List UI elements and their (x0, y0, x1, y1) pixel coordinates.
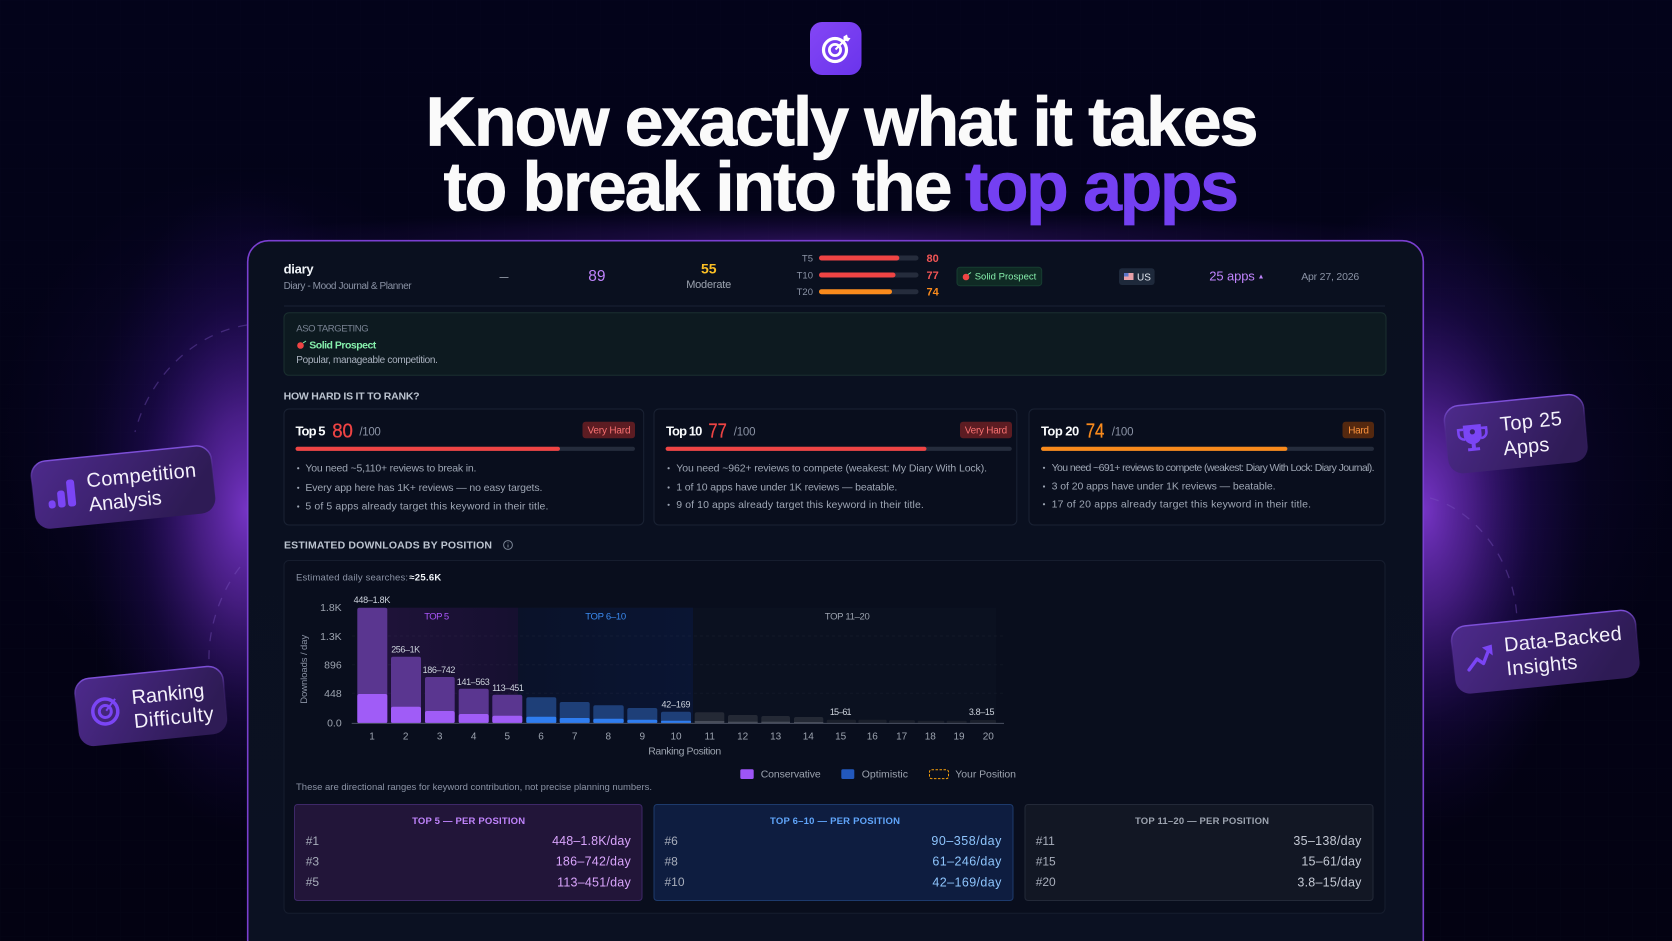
keyword header row: 55 (701, 260, 717, 276)
panel: top 11-20 per position (1025, 804, 1373, 900)
callout: data-backed insights (1450, 609, 1641, 695)
keyword header row (284, 253, 1359, 299)
bar chart: 8 (606, 732, 612, 742)
panel: top 5 difficulty: You need ~5,110+ reviews to break in. (305, 462, 476, 474)
title (426, 82, 1258, 226)
panel: top 5 difficulty: 80 (332, 420, 353, 442)
panel: top 20 difficulty: Hard (1348, 426, 1369, 436)
keyword header row: Diary - Mood Journal & Planner (284, 281, 412, 292)
keyword header row: diary (284, 262, 314, 276)
panel: top 5 per position: 113–451/day (557, 875, 631, 889)
keyword header row: Moderate (686, 279, 731, 291)
panel: top 20 difficulty (1029, 409, 1385, 525)
dashed connector arcs (135, 325, 1517, 662)
callout: competition analysis: Analysis (88, 487, 163, 516)
callout: competition analysis: Competition (85, 460, 197, 492)
bar chart: 3 (437, 732, 443, 742)
keyword header row: Apr 27, 2026 (1301, 271, 1359, 283)
bar chart: 15 (835, 732, 847, 742)
title: top apps (965, 148, 1239, 226)
bar chart: TOP 6–10 (585, 611, 626, 622)
bar chart: 17 (896, 732, 908, 742)
callout: competition analysis (30, 444, 217, 530)
callout: ranking difficulty: Difficulty (133, 703, 215, 733)
panel: downloads chart: Estimated daily searches: (296, 572, 408, 583)
icon: bar chart (46, 479, 76, 509)
icon: trophy (1458, 423, 1488, 452)
panel: ASO targeting: Popular, manageable competition. (296, 355, 438, 366)
panel: top 10 difficulty: Very Hard (965, 426, 1007, 436)
badge: solid prospect: Solid Prospect (975, 272, 1037, 283)
score mini bars: T10 (797, 270, 813, 281)
panel: top 11-20 per position: TOP 11–20 — PER POSITION (1135, 816, 1269, 827)
panel: downloads chart: These are directional ranges for keyword contribution, not precise planning numbers. (296, 782, 652, 793)
chart legend (740, 769, 1016, 781)
panel: top 11-20 per position: #15 (1036, 854, 1056, 868)
panel: ASO targeting: Solid Prospect (309, 340, 377, 352)
panel: top 5 difficulty: Top 5 (296, 423, 326, 438)
callout: data-backed insights: Insights (1505, 651, 1578, 680)
bar chart (299, 595, 1004, 758)
bar chart: TOP 5 (424, 611, 449, 622)
panel: top 20 difficulty: 17 of 20 apps already target this keyword in their title. (1052, 498, 1311, 510)
callout: ranking difficulty (73, 665, 229, 748)
bar chart: 896 (324, 660, 342, 672)
bar chart: 15–61 (830, 707, 852, 717)
panel: top 6-10 per position: TOP 6–10 — PER POSITION (770, 816, 900, 827)
score mini bars: T20 (797, 287, 813, 298)
title: to break into the (444, 148, 952, 226)
bar chart: Downloads / day (299, 635, 310, 704)
panel: top 6-10 per position: #10 (664, 875, 685, 889)
icon: trend arrow (1467, 645, 1494, 670)
panel: top 10 difficulty: 1 of 10 apps have under 1K reviews — beatable. (676, 482, 897, 494)
bar chart: 16 (867, 732, 878, 742)
bar chart: 42–169 (662, 700, 690, 710)
panel: top 5 per position: #1 (306, 834, 319, 848)
callout: top 25 apps: Apps (1502, 434, 1550, 460)
bar chart: 13 (770, 732, 782, 742)
panel: downloads chart: ≈25.6K (409, 572, 441, 583)
panel: top 10 difficulty: /100 (734, 426, 756, 438)
panel: top 20 difficulty: 74 (1086, 420, 1104, 442)
panel: top 5 difficulty: Every app here has 1K+ reviews — no easy targets. (305, 482, 542, 494)
panel: top 5 per position: #5 (306, 875, 319, 889)
bar chart: 14 (803, 732, 814, 742)
panel: top 20 difficulty: You need ~691+ reviews to compete (weakest: Diary With Lock: Diary Journal). (1052, 462, 1375, 474)
bar chart: 448–1.8K (354, 595, 390, 605)
bar chart: 4 (471, 732, 477, 742)
bar chart: 10 (670, 732, 682, 742)
panel: top 6-10 per position: 90–358/day (931, 834, 1002, 848)
chart legend: Conservative (761, 769, 821, 781)
panel: top 6-10 per position: 42–169/day (932, 875, 1002, 889)
bar chart: TOP 11–20 (825, 611, 870, 622)
badge: country: US (1137, 272, 1151, 283)
title: Know exactly what it takes (426, 82, 1258, 160)
bar chart: 0.0 (327, 718, 342, 730)
score mini bars: 74 (926, 287, 940, 299)
panel: ASO targeting (284, 313, 1386, 375)
panel: ASO targeting: ASO TARGETING (296, 323, 369, 334)
panel: top 6-10 per position: 61–246/day (932, 855, 1002, 869)
bar chart: 1.8K (320, 602, 342, 614)
panel: top 5 per position: #3 (306, 854, 319, 868)
panel: top 20 difficulty: /100 (1112, 426, 1134, 438)
panel: top 5 per position: 448–1.8K/day (552, 834, 631, 848)
bar chart: 9 (640, 732, 646, 742)
panel: top 11-20 per position: 3.8–15/day (1297, 875, 1362, 889)
panel: top 5 per position: 186–742/day (556, 855, 631, 869)
bar chart: 18 (925, 732, 936, 742)
panel: top 10 difficulty: Top 10 (666, 423, 702, 438)
score mini bars: 80 (926, 253, 939, 265)
panel: top 20 difficulty: Top 20 (1041, 423, 1079, 438)
bar chart: 186–742 (423, 665, 455, 675)
keyword header row: 89 (588, 268, 606, 285)
chart legend: Optimistic (862, 769, 908, 781)
callout: ranking difficulty: Ranking (131, 680, 205, 709)
panel: top 10 difficulty (654, 409, 1017, 525)
bar chart: 5 (505, 732, 511, 742)
callout: top 25 apps: Top 25 (1499, 408, 1563, 436)
bar chart: 19 (953, 732, 965, 742)
panel: top 11-20 per position: 35–138/day (1293, 834, 1362, 848)
bar chart: 141–563 (457, 677, 490, 687)
badge: country (1119, 268, 1155, 285)
callout: data-backed insights: Data-Backed (1503, 623, 1623, 657)
keyword header row: — (500, 270, 508, 284)
panel: top 5 per position (294, 804, 642, 900)
panel: top 11-20 per position: #20 (1036, 875, 1056, 889)
bar chart: 1 (369, 732, 375, 742)
callout: top 25 apps (1443, 393, 1589, 475)
bar chart: 448 (324, 688, 342, 700)
bar chart: 12 (737, 732, 749, 742)
score mini bars (797, 253, 940, 299)
bar chart: 256–1K (391, 644, 420, 654)
keyword header row: 25 apps (1209, 268, 1255, 284)
panel: dashboard card (248, 241, 1423, 941)
panel: top 10 difficulty: You need ~962+ reviews to compete (weakest: My Diary With Lock). (676, 462, 987, 474)
heading: estimated downloads: ESTIMATED DOWNLOADS BY POSITION (284, 540, 492, 552)
bar chart: 1.3K (320, 631, 342, 643)
score mini bars: 77 (926, 270, 939, 282)
bar chart: 6 (538, 732, 544, 742)
panel: top 20 difficulty: 3 of 20 apps have under 1K reviews — beatable. (1052, 481, 1276, 493)
panel: top 11-20 per position: #11 (1036, 834, 1055, 848)
badge: solid prospect (957, 267, 1042, 286)
bar chart: 3.8–15 (969, 707, 995, 717)
panel: top 10 difficulty: 77 (708, 420, 727, 442)
panel: top 5 difficulty: 5 of 5 apps already target this keyword in their title. (305, 501, 548, 513)
bar chart: 113–451 (492, 683, 524, 693)
panel: top 5 per position: TOP 5 — PER POSITION (412, 816, 525, 827)
panel: top 6-10 per position: #8 (664, 854, 678, 868)
bar chart: 11 (705, 732, 715, 742)
panel: top 10 difficulty: 9 of 10 apps already target this keyword in their title. (676, 499, 924, 511)
panel: top 5 difficulty (284, 409, 644, 525)
chart legend: Your Position (955, 769, 1016, 781)
panel: top 11-20 per position: 15–61/day (1301, 855, 1362, 869)
panel: top 5 difficulty: Very Hard (588, 426, 630, 436)
heading: how hard: HOW HARD IS IT TO RANK? (284, 390, 420, 402)
bar chart: 2 (403, 732, 409, 742)
bar chart: 20 (983, 732, 994, 742)
panel: top 5 difficulty: /100 (359, 426, 381, 438)
panel: top 6-10 per position: #6 (664, 834, 678, 848)
icon: app logo target (810, 22, 862, 75)
bar chart: Ranking Position (648, 746, 721, 758)
panel: downloads chart (284, 560, 1385, 913)
bar chart: 7 (572, 732, 578, 742)
icon: target (92, 698, 119, 725)
panel: top 6-10 per position (654, 804, 1013, 900)
score mini bars: T5 (802, 253, 813, 264)
